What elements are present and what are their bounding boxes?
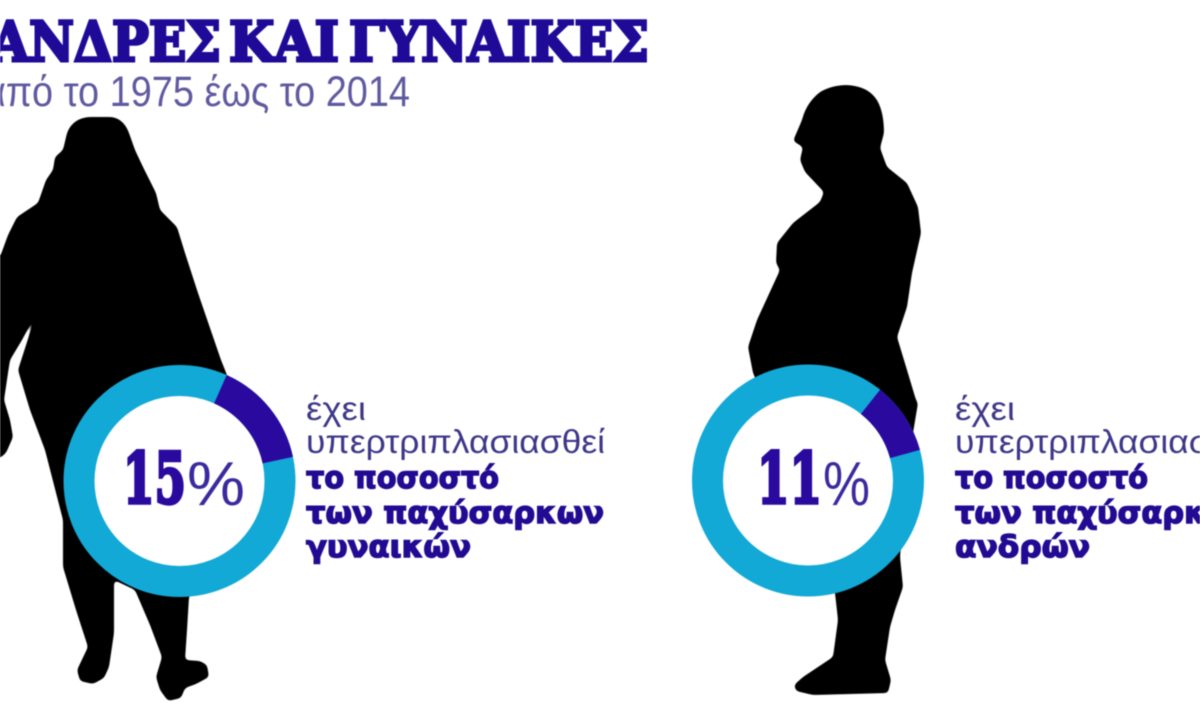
text block: women bbox=[306, 390, 605, 565]
title: ΓΥΝΑΙΚΕΣ bbox=[349, 9, 649, 74]
value: 11 percent: % bbox=[823, 450, 870, 519]
silhouette: man bbox=[748, 85, 921, 695]
text block: men: ανδρών bbox=[955, 530, 1090, 565]
donut segment: men highlighted share bbox=[870, 402, 905, 454]
text block: women: έχει bbox=[306, 390, 366, 427]
donut segment: women highlighted share bbox=[220, 389, 278, 460]
donut chart: women 15% bbox=[79, 380, 280, 582]
value: 15 percent: 15 bbox=[123, 437, 186, 520]
text block: men: το ποσοστό bbox=[955, 461, 1148, 496]
text block: women: γυναικών bbox=[306, 530, 471, 565]
text block: men bbox=[955, 390, 1200, 565]
value: 15 percent: % bbox=[187, 450, 245, 519]
text block: women: υπερτριπλασιασθεί bbox=[306, 423, 605, 460]
title: ΚΑΙ bbox=[229, 9, 339, 74]
text block: men: έχει bbox=[955, 390, 1015, 427]
silhouette: woman bbox=[0, 117, 240, 701]
value: 11 percent: 11 bbox=[757, 437, 822, 520]
donut chart: men 11% bbox=[708, 380, 908, 581]
text block: women: των παχύσαρκων bbox=[306, 496, 604, 531]
text block: women: το ποσοστό bbox=[306, 461, 499, 496]
title bbox=[0, 9, 649, 74]
